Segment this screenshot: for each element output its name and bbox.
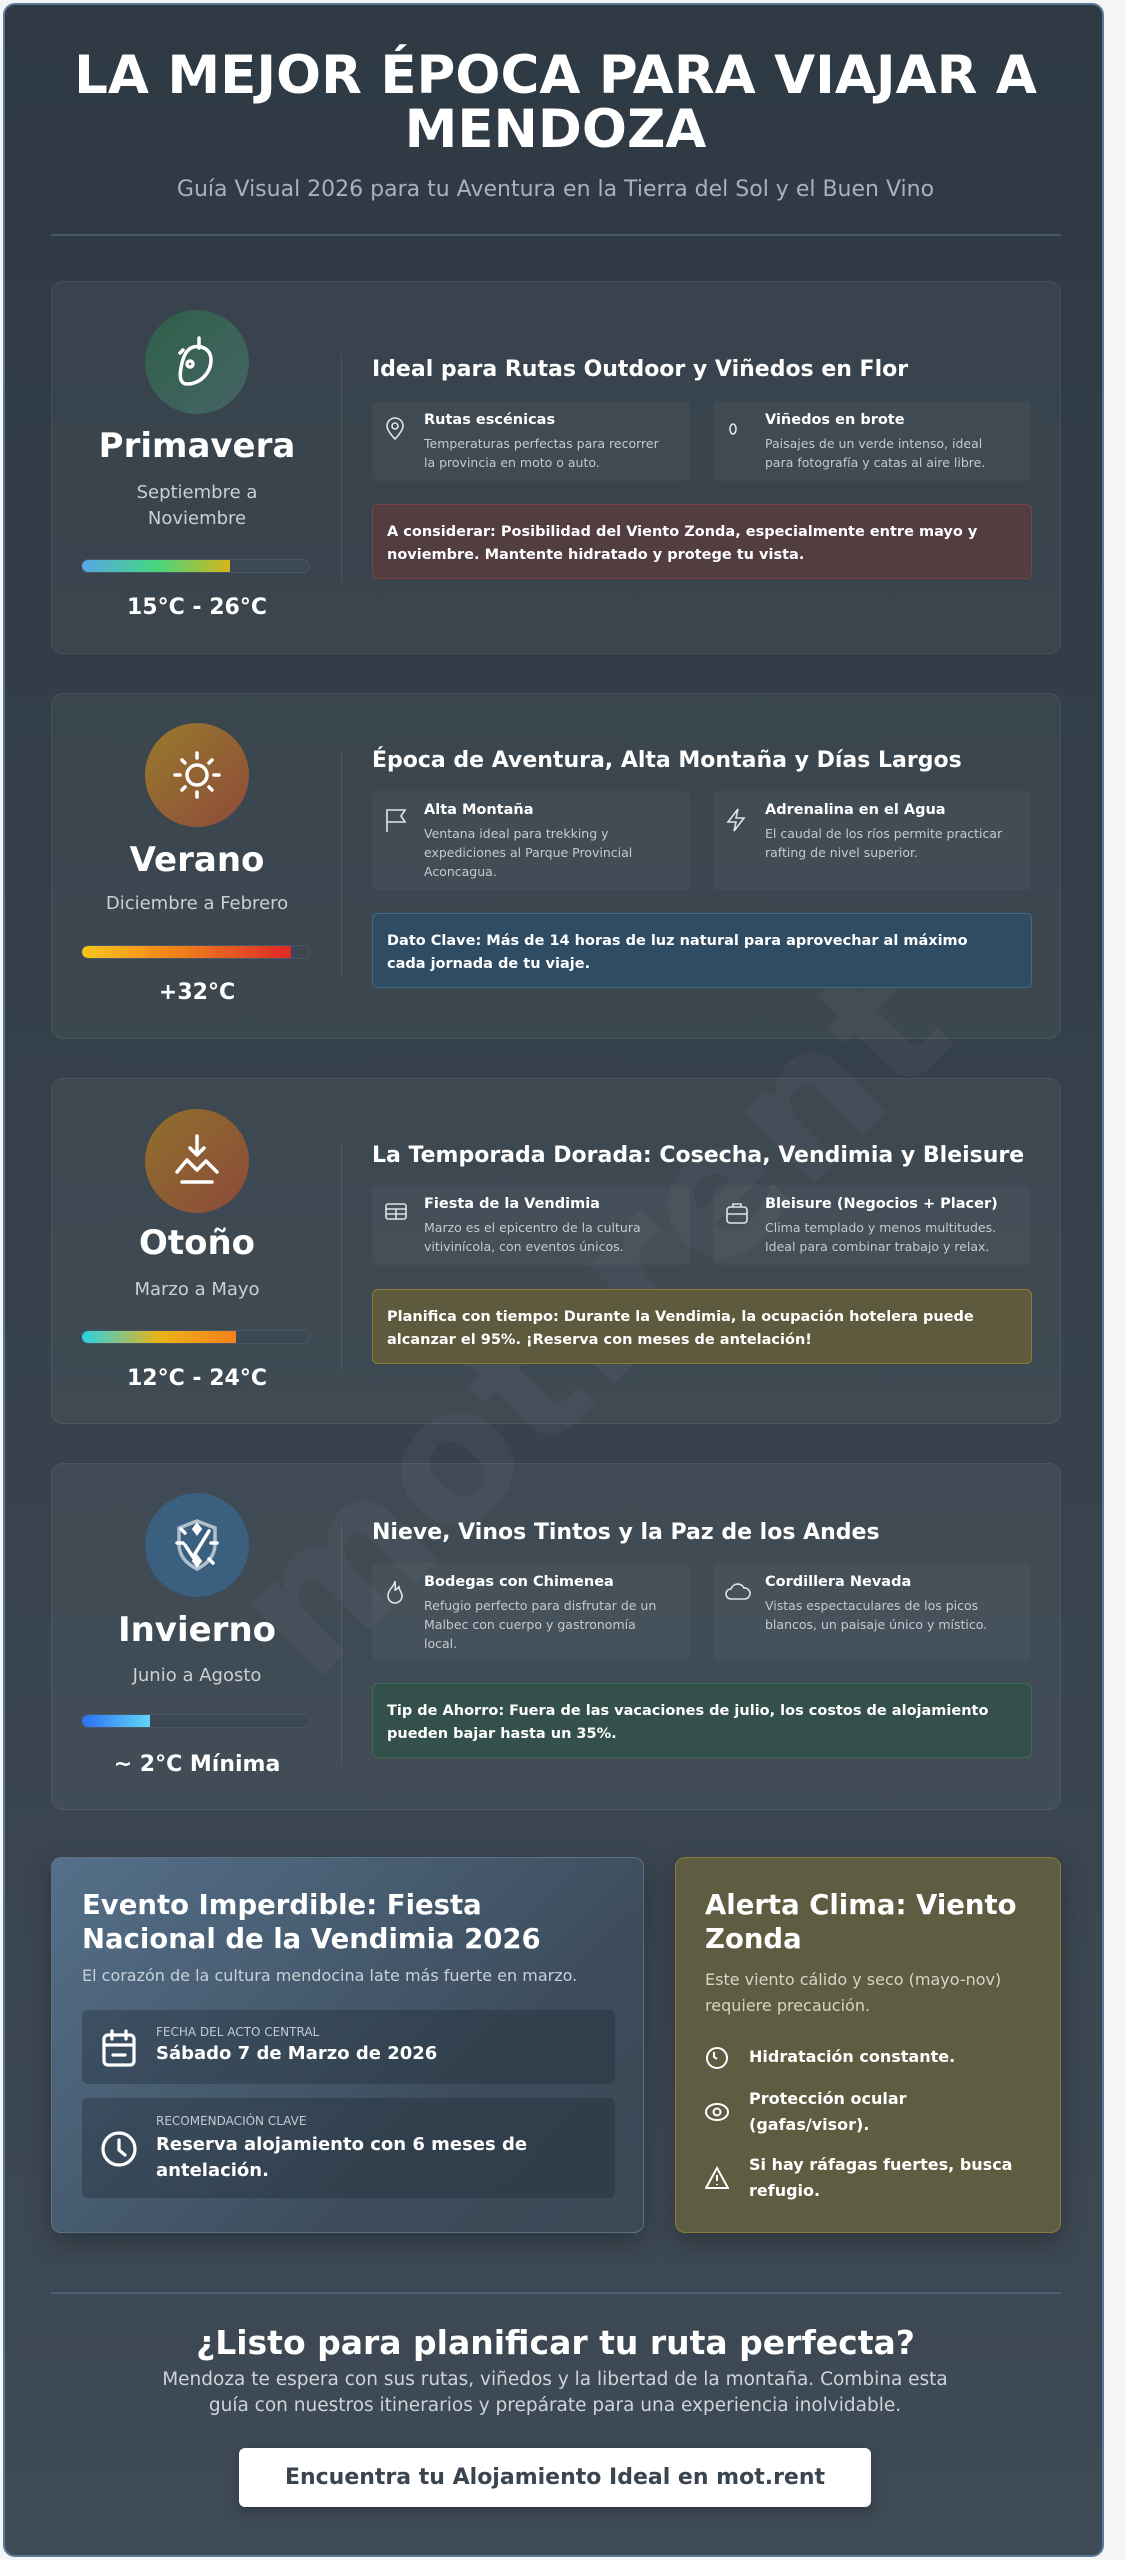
- recommendation box: RECOMENDACIÓN CLAVE: [156, 2114, 306, 2128]
- feature: bodegas: Bodegas con Chimenea: [424, 1574, 614, 1590]
- feature: fiesta vendimia: Fiesta de la Vendimia: [424, 1196, 600, 1212]
- title: [74, 44, 1037, 160]
- temp bar: [81, 945, 310, 959]
- feature: viñedos: Viñedos en brote: [765, 412, 905, 428]
- panel: evento vendimia: [51, 1857, 644, 2233]
- title: LA MEJOR ÉPOCA PARA VIAJAR A: [74, 45, 1037, 106]
- feature: bodegas: [372, 1563, 690, 1660]
- heading: La Temporada Dorada: Cosecha, Vendimia y Bleisure: [372, 1143, 1024, 1168]
- event title: Nacional de la Vendimia 2026: [82, 1923, 541, 1955]
- panel: verano: [51, 693, 1061, 1039]
- panel: alerta zonda: [675, 1857, 1061, 2233]
- feature: alta montaña: [372, 791, 690, 890]
- temperature: 15°C - 26°C: [127, 595, 267, 620]
- feature: alta montaña: Ventana ideal para trekking y expediciones al Parque Provincial Aconcagua.: [424, 826, 632, 879]
- subtitle: Guía Visual 2026 para tu Aventura en la Tierra del Sol y el Buen Vino: [177, 177, 934, 202]
- panel: primavera: [51, 281, 1061, 654]
- cta text: Mendoza te espera con sus rutas, viñedos y la libertad de la montaña. Combina esta guía con nuestros itinerarios y prepárate para una experiencia inolvidable.: [162, 2369, 948, 2416]
- feature: cordillera: Vistas espectaculares de los picos blancos, un paisaje único y místico.: [765, 1598, 987, 1632]
- item: refugio: Si hay ráfagas fuertes, busca refugio.: [749, 2155, 1012, 2200]
- cta button: Encuentra tu Alojamiento Ideal en mot.rent: [285, 2465, 825, 2490]
- feature: fiesta vendimia: Marzo es el epicentro de la cultura vitivinícola, con eventos únicos.: [424, 1220, 641, 1254]
- feature: bodegas: Refugio perfecto para disfrutar de un Malbec con cuerpo y gastronomía local.: [424, 1598, 656, 1651]
- callout: [372, 1683, 1032, 1758]
- season name: Verano: [130, 840, 264, 880]
- watermark: mot.rent: [190, 917, 990, 1717]
- date box: Sábado 7 de Marzo de 2026: [156, 2043, 437, 2064]
- date: Diciembre a Febrero: [106, 893, 288, 914]
- callout: [372, 504, 1032, 579]
- date: [137, 482, 257, 529]
- feature: adrenalina: Adrenalina en el Agua: [765, 802, 946, 818]
- date: Noviembre: [148, 508, 246, 529]
- recommendation box: [82, 2098, 615, 2198]
- feature: adrenalina: El caudal de los ríos permite practicar rafting de nivel superior.: [765, 826, 1002, 860]
- callout: Planifica con tiempo: Durante la Vendimia, la ocupación hotelera puede alcanzar el 95%. ¡Reserva con meses de antelación!: [387, 1309, 974, 1348]
- temp bar: [81, 559, 310, 573]
- icon: clock: [101, 2131, 137, 2167]
- panel: otoño: [51, 1078, 1061, 1424]
- title: MENDOZA: [405, 99, 706, 160]
- icon: calendar: [102, 2029, 136, 2067]
- feature: viñedos: Paisajes de un verde intenso, ideal para fotografía y catas al aire libre.: [765, 436, 985, 470]
- callout: [372, 913, 1032, 988]
- temp bar: [81, 1330, 310, 1344]
- event subtitle: El corazón de la cultura mendocina late más fuerte en marzo.: [82, 1966, 577, 1985]
- icon: sun: [145, 723, 249, 827]
- heading: Nieve, Vinos Tintos y la Paz de los Andes: [372, 1520, 880, 1545]
- cta button: [239, 2448, 871, 2507]
- callout: A considerar: Posibilidad del Viento Zonda, especialmente entre mayo y noviembre. Mantente hidratado y protege tu vista.: [387, 524, 977, 563]
- heading: Época de Aventura, Alta Montaña y Días Largos: [372, 748, 962, 773]
- icon: harvest: [145, 1109, 249, 1213]
- alert text: Este viento cálido y seco (mayo-nov) requiere precaución.: [705, 1970, 1001, 2015]
- feature: adrenalina: [713, 791, 1031, 890]
- season name: Invierno: [118, 1610, 276, 1650]
- alert title: [705, 1889, 1017, 1955]
- recommendation box: Reserva alojamiento con 6 meses de antelación.: [156, 2134, 527, 2181]
- event title: [82, 1889, 541, 1955]
- feature: bleisure: Bleisure (Negocios + Placer): [765, 1196, 998, 1212]
- feature: viñedos: [713, 401, 1031, 481]
- panel: invierno: [51, 1463, 1061, 1810]
- cta heading: ¿Listo para planificar tu ruta perfecta?: [196, 2323, 915, 2362]
- feature: rutas: [372, 401, 690, 481]
- feature: bleisure: [713, 1185, 1031, 1265]
- callout: [372, 1289, 1032, 1364]
- heading: Ideal para Rutas Outdoor y Viñedos en Flor: [372, 357, 908, 382]
- season name: Primavera: [99, 426, 295, 466]
- season name: Otoño: [139, 1223, 255, 1263]
- date box: [82, 2010, 615, 2084]
- item: protección: Protección ocular (gafas/visor).: [749, 2089, 907, 2134]
- feature: cordillera: [713, 1563, 1031, 1660]
- feature: alta montaña: Alta Montaña: [424, 802, 534, 818]
- feature: fiesta vendimia: [372, 1185, 690, 1265]
- temperature: 12°C - 24°C: [127, 1366, 267, 1391]
- date: Junio a Agosto: [133, 1665, 261, 1686]
- event title: Evento Imperdible: Fiesta: [82, 1889, 482, 1921]
- feature: rutas: Temperaturas perfectas para recorrer la provincia en moto o auto.: [424, 436, 659, 470]
- alert title: Alerta Clima: Viento: [705, 1889, 1017, 1921]
- date box: FECHA DEL ACTO CENTRAL: [156, 2025, 319, 2039]
- feature: cordillera: Cordillera Nevada: [765, 1574, 911, 1590]
- icon: snow shield: [145, 1493, 249, 1597]
- temperature: ~ 2°C Mínima: [114, 1752, 280, 1777]
- date: Marzo a Mayo: [134, 1279, 260, 1300]
- alert title: Zonda: [705, 1923, 802, 1955]
- item: hidratación: Hidratación constante.: [749, 2047, 955, 2066]
- feature: bleisure: Clima templado y menos multitudes. Ideal para combinar trabajo y relax.: [765, 1220, 996, 1254]
- temperature: +32°C: [159, 980, 235, 1005]
- feature: rutas: Rutas escénicas: [424, 412, 555, 428]
- date: Septiembre a: [137, 482, 257, 503]
- temp bar: [81, 1714, 310, 1728]
- callout: Tip de Ahorro: Fuera de las vacaciones de julio, los costos de alojamiento pueden bajar hasta un 35%.: [387, 1703, 988, 1742]
- icon: primavera: [145, 310, 249, 414]
- callout: Dato Clave: Más de 14 horas de luz natural para aprovechar al máximo cada jornada de tu viaje.: [387, 933, 968, 972]
